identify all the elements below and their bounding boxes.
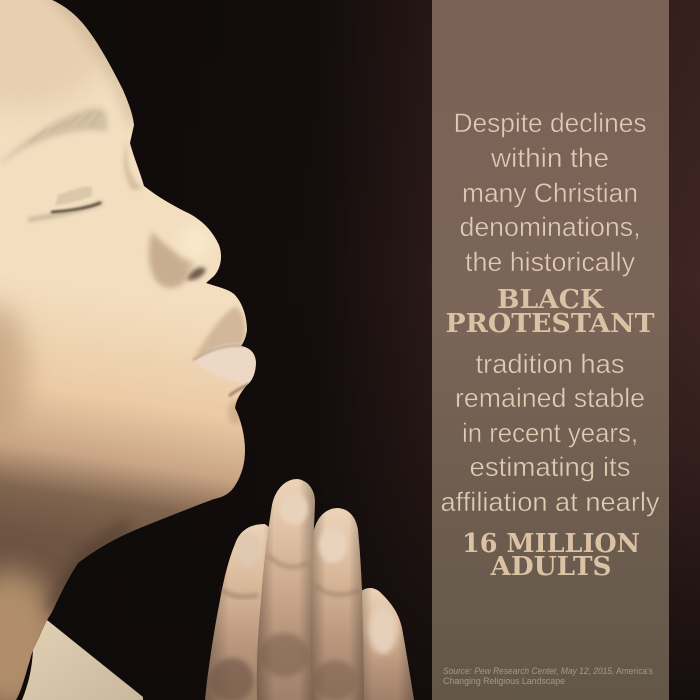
closed eye — [28, 187, 103, 220]
text: opening statement: denominations, — [460, 212, 640, 242]
source note: Source: Pew Research Center, May 12, 2015, America’s — [443, 666, 653, 677]
nose shading — [149, 225, 211, 288]
photo: praying child in profile — [0, 0, 414, 700]
heading: black protestant — [446, 285, 655, 339]
source note: Changing Religious Landscape — [443, 676, 565, 687]
praying hands — [205, 479, 414, 700]
text: opening statement — [454, 108, 646, 277]
heading: black protestant: PROTESTANT — [446, 309, 655, 339]
heading: black protestant: BLACK — [497, 285, 604, 315]
text: stability statement: affiliation at nearly — [440, 487, 660, 517]
text: opening statement: the historically — [465, 247, 635, 277]
finger: left index — [205, 524, 269, 700]
heading: 16 million adults: ADULTS — [489, 552, 612, 582]
shirt collar — [22, 620, 143, 700]
finger: middle right — [309, 508, 364, 700]
brow to lid crease — [124, 140, 143, 190]
heading: 16 million adults: 16 MILLION — [462, 529, 640, 559]
face and neck — [0, 0, 256, 700]
text: stability statement — [440, 349, 660, 517]
text: stability statement: estimating its — [470, 452, 630, 482]
source note — [443, 666, 653, 687]
text: opening statement: within the — [490, 143, 609, 173]
finger: right pinky — [362, 588, 414, 700]
text: opening statement: many Christian — [462, 178, 638, 208]
eyebrow — [0, 108, 108, 165]
text: stability statement: in recent years, — [462, 418, 638, 448]
panel: translucent text column — [432, 0, 669, 700]
text: stability statement: tradition has — [476, 349, 624, 379]
finger: middle tallest — [257, 479, 315, 700]
skin shading — [0, 0, 135, 700]
heading: 16 million adults — [462, 529, 640, 582]
lips — [193, 306, 255, 424]
text: stability statement: remained stable — [455, 383, 645, 413]
text: opening statement: Despite declines — [454, 108, 646, 138]
